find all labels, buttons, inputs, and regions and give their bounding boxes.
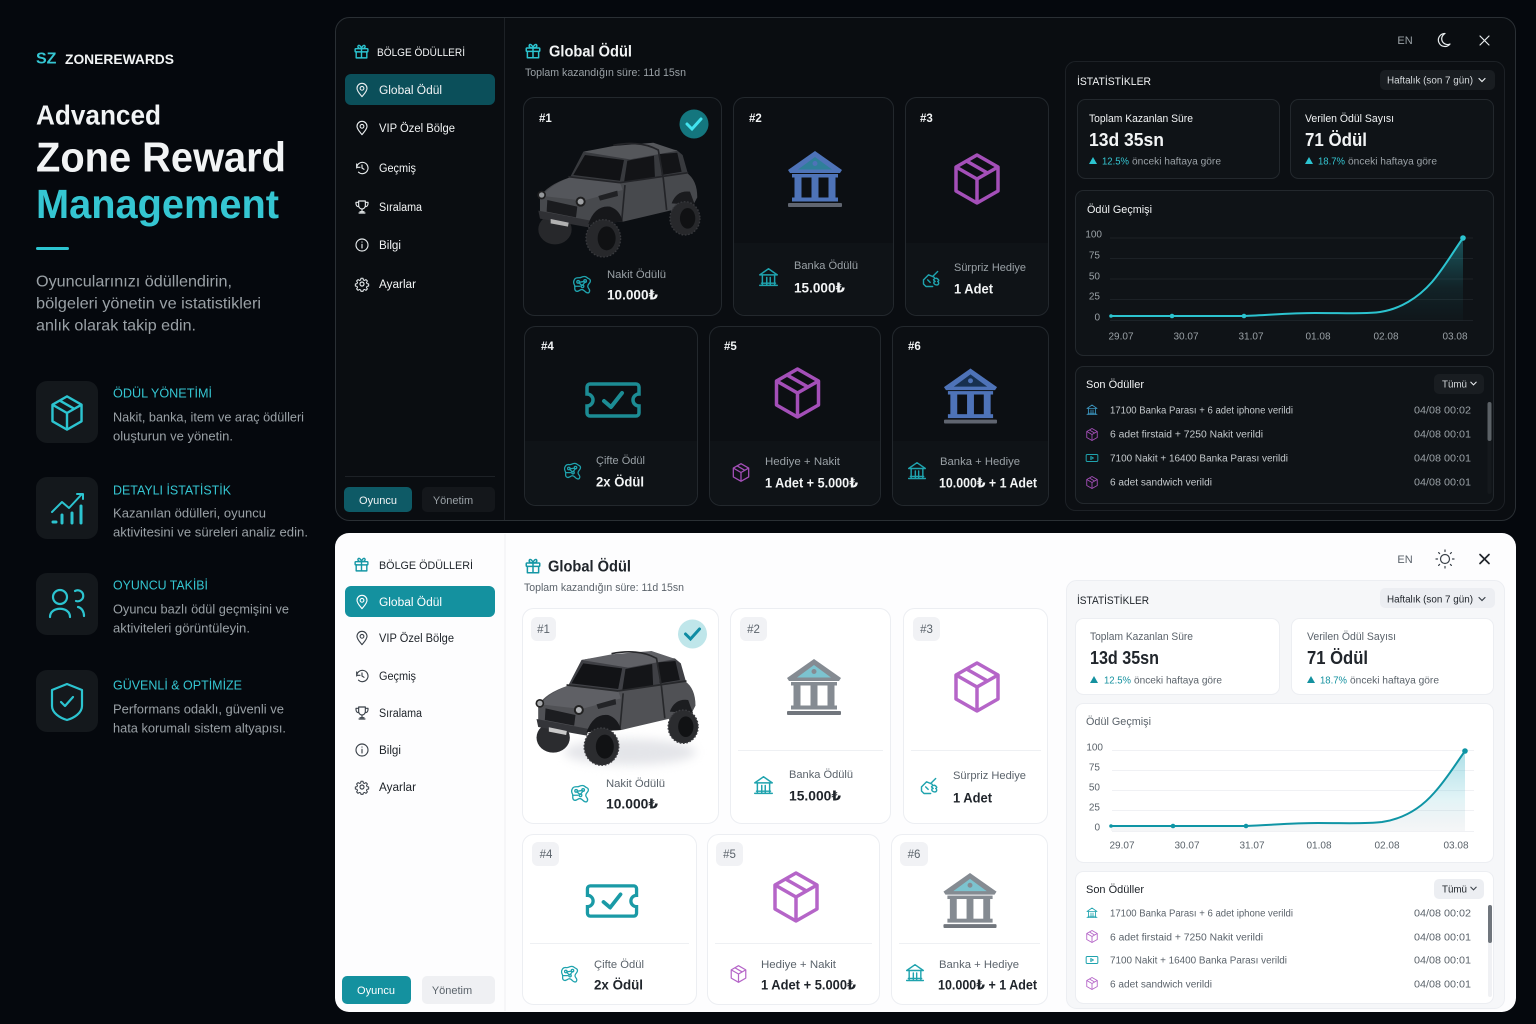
recent rewards light xyxy=(1076,872,1494,1004)
card 1 dark xyxy=(524,98,722,316)
chart light: 29.07 xyxy=(1109,840,1135,852)
card 5 light xyxy=(708,834,880,1004)
stat: ödül sayısı: önceki haftaya göre xyxy=(1350,676,1439,686)
feature: oyuncu takibi xyxy=(36,573,289,636)
recent rewards dark xyxy=(1076,366,1494,504)
icon: growth chart xyxy=(52,494,83,523)
card 4 light: Çifte Ödül xyxy=(594,959,644,971)
intro text: Oyuncularınızı ödüllendirin, xyxy=(36,274,232,290)
stats panel dark: İSTATİSTİKLER xyxy=(1077,75,1151,88)
card 2 light: Banka Ödülü xyxy=(789,769,853,781)
feature: ödül yönetimi: Nakit, banka, item ve araç ödülleri xyxy=(113,410,304,424)
stats panel light: İSTATİSTİKLER xyxy=(1077,594,1149,607)
card 2 light: 15.000₺ xyxy=(789,788,842,804)
card 5 light: Hediye + Nakit xyxy=(761,959,836,971)
range dropdown xyxy=(1380,70,1495,90)
recent rewards dark: 6 adet sandwich verildi xyxy=(1110,478,1212,488)
sidebar light: Global Ödül xyxy=(379,597,442,609)
sidebar light: Ayarlar xyxy=(379,782,416,794)
sidebar light: Sıralama xyxy=(379,708,423,720)
card 5 light: #5 xyxy=(723,849,736,861)
feature: ödül yönetimi: oluşturun ve yönetin. xyxy=(113,428,233,444)
card 1 dark: Nakit Ödülü xyxy=(607,269,666,281)
stat: süre xyxy=(1078,100,1280,178)
stat: ödül sayısı: Verilen Ödül Sayısı xyxy=(1305,113,1394,125)
card 4 light xyxy=(522,834,696,1004)
icon: users xyxy=(50,590,84,617)
card 6 light xyxy=(892,834,1048,1004)
card 3 light: 1 Adet xyxy=(953,790,992,806)
title xyxy=(36,100,286,227)
brand logo: SZ xyxy=(36,50,57,68)
sidebar light: Bilgi xyxy=(379,745,401,757)
recent rewards light: Son Ödüller xyxy=(1086,884,1144,896)
recent rewards dark: 04/08 00:02 xyxy=(1414,406,1471,416)
chart dark: 30.07 xyxy=(1173,332,1199,342)
stat: ödül sayısı: 71 Ödül xyxy=(1307,648,1368,668)
chart dark: 03.08 xyxy=(1442,332,1468,342)
feature: güvenli: Performans odaklı, güvenli ve xyxy=(113,702,284,716)
feature: güvenli xyxy=(36,670,286,736)
card 2 dark xyxy=(734,98,894,316)
card 1 light xyxy=(522,608,718,824)
sidebar light: Geçmiş xyxy=(379,671,416,683)
card 4 light: 2x Ödül xyxy=(594,978,643,992)
card 3 dark: Sürpriz Hediye xyxy=(954,262,1026,274)
card 1 dark: #1 xyxy=(539,113,552,125)
feature: oyuncu takibi: Oyuncu bazlı ödül geçmişini ve xyxy=(113,602,289,616)
card 1 light: #1 xyxy=(537,624,550,636)
card 4 dark: #4 xyxy=(541,341,554,353)
sidebar dark: Oyuncu xyxy=(359,495,397,507)
chart dark xyxy=(1076,190,1494,356)
car shadow xyxy=(564,739,696,765)
sidebar dark xyxy=(344,45,495,512)
intro text: bölgeleri yönetin ve istatistikleri xyxy=(36,296,261,312)
chart light: 75 xyxy=(1089,762,1100,774)
recent rewards dark: 04/08 00:01 xyxy=(1414,454,1471,464)
chart light: 31.07 xyxy=(1239,840,1265,852)
card 3 dark: 1 Adet xyxy=(954,282,993,296)
card 3 dark xyxy=(906,98,1048,316)
chart dark: 0 xyxy=(1094,312,1100,324)
chart dark: 100 xyxy=(1085,230,1102,240)
stat: ödül sayısı: 18.7% xyxy=(1318,156,1345,168)
title: Management xyxy=(36,181,279,227)
stat: süre: 12.5% xyxy=(1102,156,1129,168)
sidebar light xyxy=(342,558,495,1004)
stats panel dark xyxy=(1066,62,1504,510)
stat: süre: önceki haftaya göre xyxy=(1134,676,1222,686)
feature: güvenli: hata korumalı sistem altyapısı. xyxy=(113,720,286,736)
recent rewards light: 6 adet firstaid + 7250 Nakit verildi xyxy=(1110,932,1263,944)
feature: ödül yönetimi xyxy=(36,381,304,444)
top controls light: EN xyxy=(1397,554,1413,566)
recent rewards light: 04/08 00:01 xyxy=(1414,932,1471,944)
recent rewards light: 04/08 00:01 xyxy=(1414,956,1471,966)
chart light: 30.07 xyxy=(1174,840,1200,852)
stat: süre: Toplam Kazanlan Süre xyxy=(1090,631,1193,643)
chart light: Ödül Geçmişi xyxy=(1086,716,1151,728)
stats panel light xyxy=(1066,580,1504,1008)
range dropdown xyxy=(1380,588,1495,608)
card 5 dark: Hediye + Nakit xyxy=(765,456,840,468)
chart dark: 50 xyxy=(1089,272,1100,282)
chart dark: Ödül Geçmişi xyxy=(1087,204,1152,216)
card 6 light: Banka + Hediye xyxy=(939,959,1019,971)
check badge xyxy=(680,110,708,138)
recent rewards light: 04/08 00:01 xyxy=(1414,980,1471,990)
chart dark: 31.07 xyxy=(1238,332,1264,342)
feature: detaylı istatistik: aktivitesini ve süreleri analiz edin. xyxy=(113,524,308,540)
heading light: Global Ödül xyxy=(548,556,631,576)
chart dark: 75 xyxy=(1089,250,1100,262)
stat: ödül sayısı: 18.7% xyxy=(1320,676,1347,686)
sidebar light: Oyuncu xyxy=(357,985,395,997)
card 6 dark: #6 xyxy=(908,341,921,353)
card 6 dark: Banka + Hediye xyxy=(940,456,1020,468)
chart light: 0 xyxy=(1094,822,1100,834)
card 5 dark xyxy=(710,326,880,506)
card 4 dark: 2x Ödül xyxy=(596,474,644,490)
recent rewards dark: 04/08 00:01 xyxy=(1414,478,1471,488)
title: Zone Reward xyxy=(36,134,286,180)
sidebar light: BÖLGE ÖDÜLLERİ xyxy=(379,559,473,572)
panel: dark theme xyxy=(336,18,1516,520)
recent rewards dark: 7100 Nakit + 16400 Banka Parası verildi xyxy=(1110,454,1288,464)
feature: güvenli: GÜVENLİ & OPTİMİZE xyxy=(113,678,242,692)
icon: shield xyxy=(52,684,82,720)
chart light: 01.08 xyxy=(1306,840,1332,852)
chart dark: 01.08 xyxy=(1305,332,1331,342)
stat: süre: 13d 35sn xyxy=(1090,648,1159,668)
sidebar dark: Yönetim xyxy=(433,495,473,507)
range dropdown: Haftalık (son 7 gün) xyxy=(1387,76,1473,86)
sidebar dark: Sıralama xyxy=(379,202,423,214)
card 1 light: Nakit Ödülü xyxy=(606,778,665,790)
heading dark xyxy=(525,42,686,79)
sidebar light: Yönetim xyxy=(432,985,472,997)
stat: ödül sayısı: Verilen Ödül Sayısı xyxy=(1307,631,1396,643)
card 2 dark: Banka Ödülü xyxy=(794,260,858,272)
stat: süre xyxy=(1076,618,1280,694)
card 3 light: Sürpriz Hediye xyxy=(953,770,1026,782)
card 5 light: 1 Adet + 5.000₺ xyxy=(761,978,857,992)
feature: detaylı istatistik: Kazanılan ödülleri, oyuncu xyxy=(113,506,266,520)
icon: box xyxy=(52,396,82,430)
recent rewards light: Tümü xyxy=(1442,884,1467,896)
chart light: 02.08 xyxy=(1374,840,1400,852)
stat: ödül sayısı: önceki haftaya göre xyxy=(1348,156,1437,168)
check badge xyxy=(678,620,707,648)
stat: süre: önceki haftaya göre xyxy=(1132,156,1221,168)
card 5 dark: #5 xyxy=(724,341,737,353)
card 6 dark xyxy=(892,326,1048,506)
card 6 light: 10.000₺ + 1 Adet xyxy=(938,978,1037,992)
card 3 dark: #3 xyxy=(920,113,933,125)
card 2 dark: #2 xyxy=(749,113,762,125)
chart light: 03.08 xyxy=(1443,840,1469,852)
card 4 light: #4 xyxy=(540,849,553,861)
card 2 dark: 15.000₺ xyxy=(794,280,846,296)
card 1 light: 10.000₺ xyxy=(606,796,659,812)
top controls light xyxy=(1397,550,1489,568)
card 2 light xyxy=(730,608,890,824)
sidebar light: VIP Özel Bölge xyxy=(379,633,454,645)
stat: süre: 13d 35sn xyxy=(1089,130,1164,150)
sidebar dark: Bilgi xyxy=(379,240,401,252)
stat: ödül sayısı xyxy=(1292,618,1494,694)
feature: detaylı istatistik xyxy=(36,477,308,540)
stat: ödül sayısı xyxy=(1290,100,1494,178)
feature: oyuncu takibi: aktiviteleri görüntüleyin. xyxy=(113,620,250,636)
heading light: Toplam kazandığın süre: 11d 15sn xyxy=(524,582,684,594)
sidebar dark: BÖLGE ÖDÜLLERİ xyxy=(377,46,465,59)
card 6 dark: 10.000₺ + 1 Adet xyxy=(939,476,1037,490)
chart dark: 29.07 xyxy=(1108,332,1134,342)
card 4 dark xyxy=(524,326,698,506)
recent rewards dark: 17100 Banka Parası + 6 adet iphone verildi xyxy=(1110,406,1293,416)
recent rewards dark: Tümü xyxy=(1442,380,1467,390)
card 3 light: #3 xyxy=(920,624,933,636)
heading light xyxy=(524,556,684,594)
stat: süre: Toplam Kazanlan Süre xyxy=(1089,113,1193,125)
feature: oyuncu takibi: OYUNCU TAKİBİ xyxy=(113,578,208,592)
sidebar dark: Global Ödül xyxy=(379,85,442,97)
chart light: 100 xyxy=(1086,742,1103,754)
heading dark: Global Ödül xyxy=(549,42,632,60)
chart light: 50 xyxy=(1089,782,1100,794)
intro text: anlık olarak takip edin. xyxy=(36,318,196,334)
recent rewards dark: Son Ödüller xyxy=(1086,379,1144,391)
range dropdown: Haftalık (son 7 gün) xyxy=(1387,594,1473,606)
recent rewards light: 7100 Nakit + 16400 Banka Parası verildi xyxy=(1110,956,1287,966)
feature: ödül yönetimi: ÖDÜL YÖNETİMİ xyxy=(113,386,212,400)
recent rewards dark: 6 adet firstaid + 7250 Nakit verildi xyxy=(1110,430,1263,440)
card 1 dark: 10.000₺ xyxy=(607,288,659,302)
stat: ödül sayısı: 71 Ödül xyxy=(1305,130,1367,150)
recent rewards light: 6 adet sandwich verildi xyxy=(1110,980,1212,990)
heading dark: Toplam kazandığın süre: 11d 15sn xyxy=(525,67,686,79)
sidebar dark: Ayarlar xyxy=(379,279,416,291)
card 6 light: #6 xyxy=(908,849,920,861)
top controls dark xyxy=(1397,33,1489,47)
card 4 dark: Çifte Ödül xyxy=(596,455,645,467)
card 5 dark: 1 Adet + 5.000₺ xyxy=(765,476,859,490)
chart light xyxy=(1076,704,1494,862)
recent rewards light: 17100 Banka Parası + 6 adet iphone verildi xyxy=(1110,908,1293,920)
brand logo: ZONEREWARDS xyxy=(65,51,174,67)
recent rewards light: 04/08 00:02 xyxy=(1414,908,1471,920)
chart light: 25 xyxy=(1089,802,1100,814)
car xyxy=(537,143,700,257)
top controls dark: EN xyxy=(1397,35,1413,47)
chart dark: 25 xyxy=(1089,292,1100,302)
chart dark: 02.08 xyxy=(1373,332,1399,342)
stat: süre: 12.5% xyxy=(1104,676,1131,686)
card 3 light xyxy=(904,608,1048,824)
recent rewards dark: 04/08 00:01 xyxy=(1414,430,1471,440)
intro text xyxy=(36,274,261,334)
sidebar dark: VIP Özel Bölge xyxy=(379,123,455,135)
panel: light theme xyxy=(335,533,1516,1012)
car xyxy=(536,651,698,765)
card 2 light: #2 xyxy=(747,624,760,636)
feature: detaylı istatistik: DETAYLI İSTATİSTİK xyxy=(113,482,231,498)
title: Advanced xyxy=(36,100,161,130)
sidebar dark: Geçmiş xyxy=(379,163,416,175)
